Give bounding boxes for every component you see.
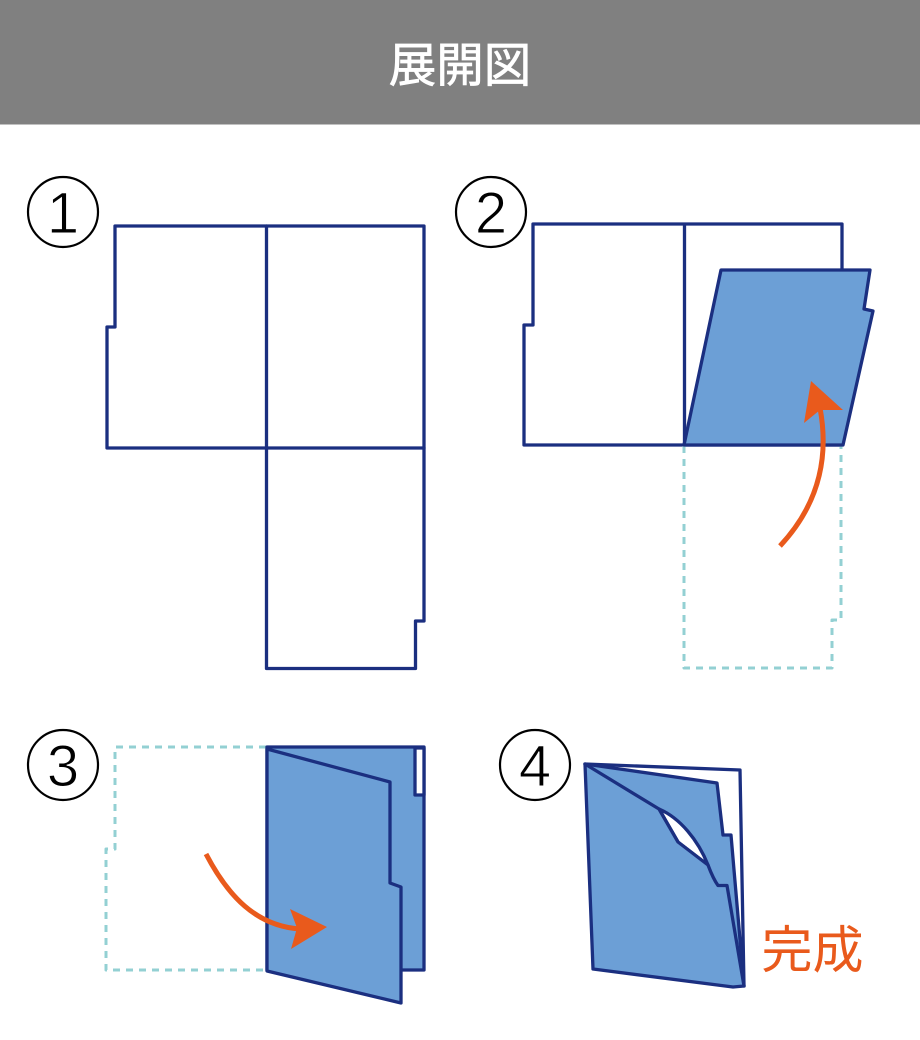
number badge 1: 1 (47, 181, 79, 246)
arrow: fold upward (780, 381, 843, 546)
completed label: 完成 (761, 922, 864, 979)
panel: step 3 (28, 730, 424, 1003)
panel: step 2 (456, 177, 873, 668)
header banner: 展開図 (389, 40, 531, 93)
middle blue sheet (585, 764, 744, 986)
white notch (415, 748, 424, 795)
panel: step 4 (500, 730, 864, 987)
number badge 3: 3 (47, 734, 79, 799)
header banner (0, 0, 920, 124)
dashed fold origin (106, 747, 266, 970)
back blue sheet (267, 747, 424, 970)
number badge 2: 2 (475, 181, 507, 246)
arrow: fold right (206, 854, 327, 949)
number badge 4: 4 (519, 734, 551, 799)
white back sheet (585, 764, 744, 986)
unfolded net (107, 226, 424, 668)
panel: step 1 (28, 177, 424, 668)
front blue sheet (267, 749, 401, 1003)
dashed fold origin (684, 446, 841, 668)
folded blue flap (684, 270, 873, 445)
white gap in the folder (659, 809, 708, 865)
number badge 1 (28, 177, 98, 247)
number badge 2 (456, 177, 526, 247)
front blue sheet (585, 764, 744, 987)
number badge 3 (28, 730, 98, 800)
number badge 4 (500, 730, 570, 800)
back sheet outline (524, 224, 842, 445)
